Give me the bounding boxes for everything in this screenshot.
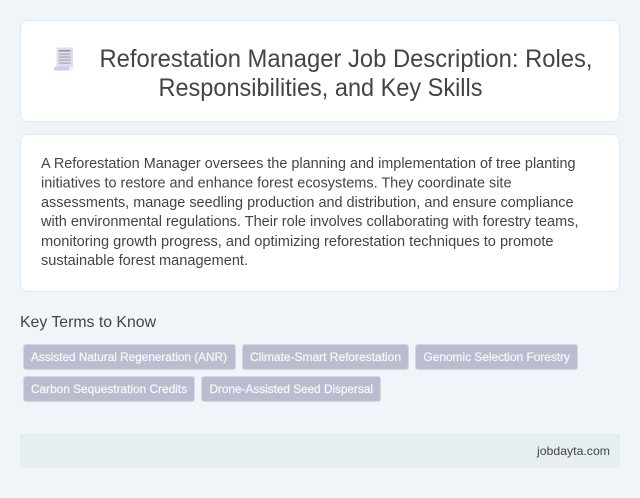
tag: climate-smart: Climate-Smart Reforestation (250, 350, 401, 364)
heading: key terms: Key Terms to Know (20, 314, 156, 331)
tag: genomic selection: Genomic Selection Forestry (424, 350, 570, 364)
panel: description (20, 134, 620, 292)
icon: document scroll (54, 48, 73, 71)
text block: description: with environmental regulations. Their role involves collaborating with forestry teams, (40, 214, 578, 230)
text block: description: A Reforestation Manager oversees the planning and implementation of tree planting (41, 156, 576, 172)
tags: key terms (24, 344, 578, 402)
tag: climate-smart (242, 344, 408, 370)
title: Reforestation Manager Job Description: Roles, (100, 45, 592, 73)
text block: description: sustainable forest management. (41, 253, 248, 269)
text block: description: assessments, manage seedling production and distribution, and ensure compliance (41, 195, 574, 211)
tag: carbon credits: Carbon Sequestration Credits (31, 382, 187, 396)
footer (20, 434, 620, 468)
title: Responsibilities, and Key Skills (158, 74, 482, 102)
tag: carbon credits (24, 376, 194, 402)
panel: header (20, 20, 620, 122)
tag: drone seed dispersal: Drone-Assisted Seed Dispersal (210, 382, 373, 396)
text block: description (40, 156, 578, 269)
footer source text: jobdayta.com (536, 444, 610, 458)
tag: genomic selection (416, 344, 578, 370)
text block: description: monitoring growth progress, and optimizing reforestation techniques to promote (41, 234, 554, 250)
tag: drone seed dispersal (202, 376, 380, 402)
text block: description: initiatives to restore and enhance forest ecosystems. They coordinate site (41, 176, 512, 192)
tag: ANR (24, 344, 236, 370)
title (100, 45, 592, 102)
tag: ANR: Assisted Natural Regeneration (ANR) (31, 350, 227, 364)
